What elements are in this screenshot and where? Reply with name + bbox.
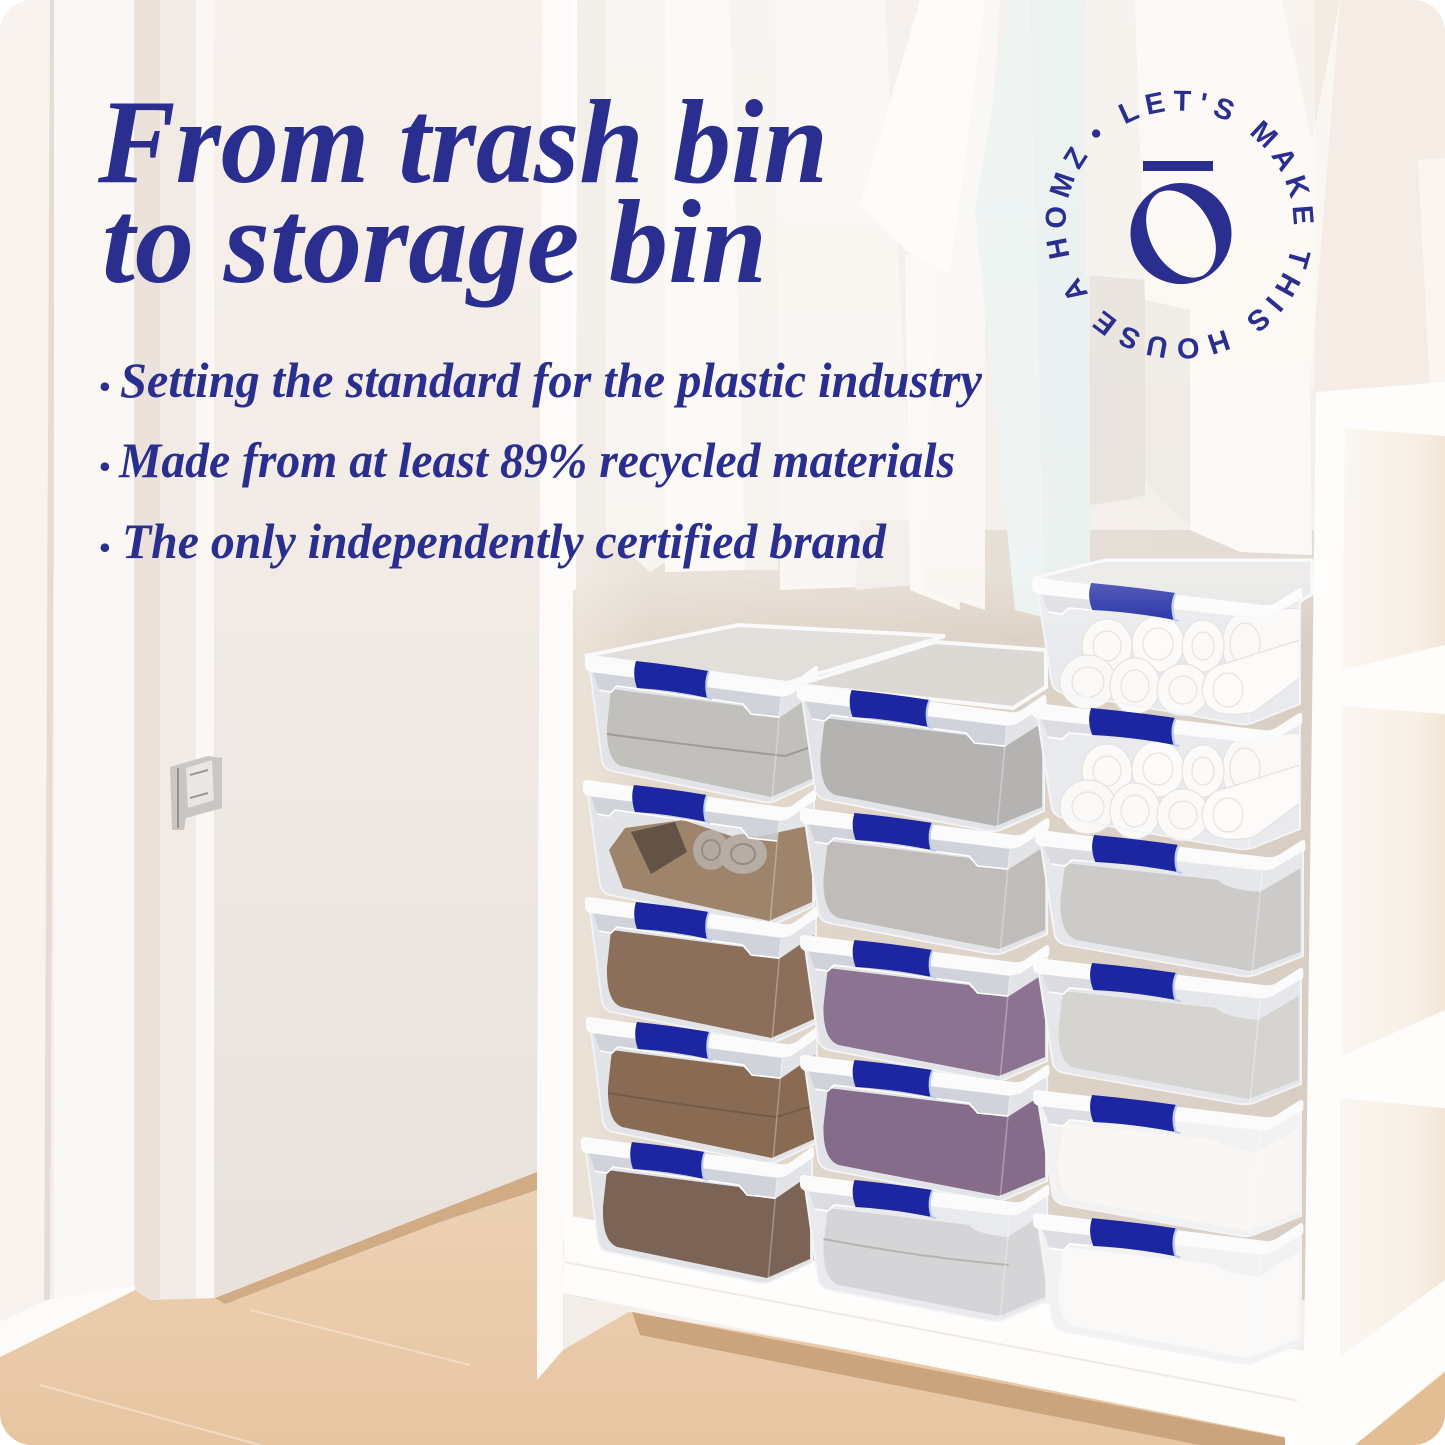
circular slogan: • LET'S MAKE THIS HOUSE A HOMZ (1046, 90, 1314, 359)
bullet: recycled materials: Made from at least 89% recycled materials (118, 432, 955, 488)
logo bar (1143, 161, 1213, 171)
left wall skirting (0, 1285, 135, 1357)
bin: taupe towel (581, 1137, 814, 1283)
icon: door hinge (170, 756, 222, 830)
lid top: column 1 (585, 625, 945, 683)
bin: light grey towel (800, 808, 1049, 954)
bullet: certified brand: The only independently certified brand (122, 513, 887, 569)
right cabinet with cubbies (1290, 382, 1445, 1445)
bin: dark purple towel (800, 1055, 1049, 1201)
bin: light grey towel (1033, 958, 1303, 1104)
bin: dark brown towel (586, 1017, 819, 1163)
wall and door frame, left (44, 0, 214, 1301)
bin: purple towel (800, 935, 1049, 1081)
shelf board (563, 1215, 1322, 1445)
closet left upright (537, 0, 577, 1380)
bullet: recycled materials: • (99, 448, 110, 484)
hanging clothes (606, 0, 1315, 617)
logo ring (1131, 183, 1232, 284)
bullet: certified brand: • (99, 529, 110, 565)
bin: rolled white towels (1032, 578, 1302, 724)
bin: brown rolled items (583, 780, 816, 926)
bin: grey towel (797, 685, 1046, 831)
bin: rolled white towels (1032, 703, 1302, 849)
bullet: plastic industry: Setting the standard for the plastic industry (120, 352, 983, 408)
title: to storage bin (102, 175, 767, 308)
title: From trash bin (97, 75, 828, 208)
lid top: column 3 (1034, 558, 1314, 606)
door panel (214, 866, 538, 1298)
bin: brown towel (585, 897, 818, 1043)
soft white wash behind text (570, 0, 1315, 640)
bin: white towel (1033, 1213, 1303, 1364)
bin: grey towel (1035, 830, 1305, 976)
bullet list (99, 352, 983, 569)
bin: white towel (1033, 1090, 1303, 1236)
bins: column 1 (581, 656, 819, 1283)
floor (0, 1172, 1400, 1445)
bins: column 2 (797, 685, 1049, 1321)
bin: grey towel (585, 656, 818, 802)
bullet: plastic industry: • (99, 368, 110, 404)
bin: pale grey towel (800, 1175, 1049, 1321)
badge: Homz logo with circular slogan (1046, 90, 1314, 359)
closet back wall (575, 530, 1314, 1300)
lid top: column 2 (797, 642, 1046, 708)
bins: column 3 (1032, 578, 1305, 1364)
